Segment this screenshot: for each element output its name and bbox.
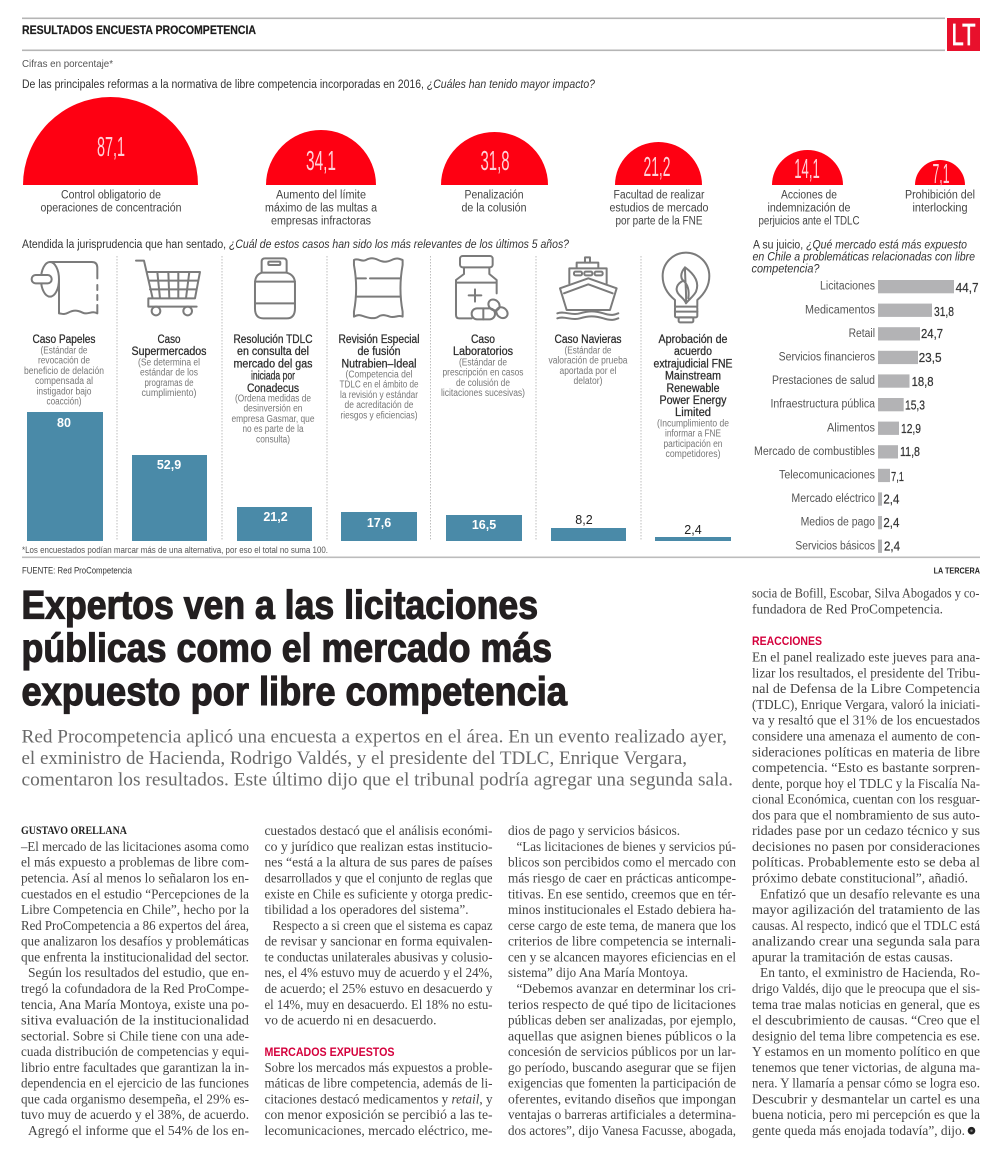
case: gas: iniciada por <box>251 371 295 383</box>
article column 4: Enfatizó que un desafío relevante es una <box>760 886 980 901</box>
case: gas: Conadecus <box>247 383 299 395</box>
bar chart: markets: 11,8 <box>900 445 920 459</box>
case: Laboratorios: de colusión de <box>456 378 510 389</box>
article column 3: sistema” dijo Ana María Montoya. <box>508 965 688 980</box>
article column 1: librio entre facultades que garantizan la in- <box>21 1060 249 1075</box>
case: Papeles: coacción) <box>46 396 82 408</box>
semicircle: límite multas <box>265 130 378 228</box>
bar chart: markets: 12,9 <box>901 422 921 436</box>
semicircle: límite multas: 34,1 <box>306 145 336 176</box>
case: gas: no es parte de la <box>242 424 304 435</box>
semicircle: control obligatorio: operaciones de concentración <box>40 202 182 214</box>
case: Mainstream: Aprobación de <box>658 334 728 346</box>
subheading: mercados expuestos: MERCADOS EXPUESTOS <box>264 1047 395 1059</box>
article column 2: Sobre los mercados más expuestos a proble- <box>264 1060 492 1075</box>
article column 1: Según los resultados del estudio, que en- <box>28 965 249 980</box>
article column 4: políticas. Probablemente esto se deba al <box>752 855 980 870</box>
article column 2: co y jurídico que realizan estas institucio- <box>264 839 492 854</box>
bar: 21,2 <box>237 507 312 541</box>
semicircle: colusión: 31,8 <box>480 145 510 176</box>
case: Papeles: revocación de <box>38 356 90 367</box>
semicircle: indemnización: perjuicios ante el TDLC <box>758 216 860 228</box>
question: market <box>752 240 975 276</box>
icon: gas cylinder <box>255 258 295 318</box>
article column 2: de revisar y sancionar en forma equivalen- <box>264 934 492 949</box>
question: cases: Atendida la jurisprudencia que han sentado, ¿Cuál de estos casos han sido los más relevantes de los últimos 5 años? <box>22 239 570 251</box>
bar chart: markets: 44,7 <box>956 281 979 295</box>
case: Nutrabien: (Competencia del <box>346 370 412 380</box>
case: Navieras: (Estándar de <box>564 346 612 356</box>
semicircle: límite multas: empresas infractoras <box>271 216 371 228</box>
case: Laboratorios: (Estándar de <box>459 358 507 368</box>
article column 2: nes, el 4% estuvo muy de acuerdo y el 24%, <box>264 965 492 980</box>
article column 2: te conductas unilaterales abusivas y colusio- <box>264 949 492 964</box>
article column 1: el más expuesto a problemas de libre com- <box>21 855 249 870</box>
semicircle: interlocking: 7,1 <box>932 158 950 189</box>
article column 1 <box>20 825 249 1138</box>
icon: medicine bottle and pills <box>456 256 510 320</box>
bar: 17,6 <box>341 512 417 541</box>
logo: LT: LT <box>952 17 976 52</box>
article column 1: que enfrenta la institucionalidad del sector. <box>21 949 249 964</box>
case: Laboratorios: prescripción en casos <box>442 368 524 379</box>
case: Laboratorios: licitaciones sucesivas) <box>441 388 525 399</box>
icon: snack bar pack <box>354 258 403 318</box>
article column 3: exigencias que fomenten la participación de <box>508 1076 736 1091</box>
semicircle: estudios de mercado <box>610 142 708 228</box>
article column 4: socia de Bofill, Escobar, Silva Abogados y co- <box>752 586 980 600</box>
article column 4: sideraciones políticas en materia de libre <box>752 744 980 759</box>
article column 4 <box>752 586 980 1138</box>
article deck: el exministro de Hacienda, Rodrigo Valdés, y el presidente del TDLC, Enrique Vergara, <box>22 748 687 769</box>
question: market: competencia? <box>752 264 820 276</box>
article column 4: dos para que el nombramiento de sus auto- <box>752 807 980 822</box>
semicircle: interlocking: interlocking <box>912 202 968 214</box>
question: market: en Chile a problemáticas relacionadas con libre <box>752 252 975 264</box>
article column 3: “Debemos avanzar en determinar los cri- <box>516 981 736 996</box>
case: Nutrabien <box>338 258 420 541</box>
case: Nutrabien: la revisión y estándar <box>340 390 419 401</box>
article column 2 <box>264 823 493 1138</box>
article column 4: designio del tema libre competencia es ese. <box>752 1028 980 1043</box>
bar chart: markets: 15,3 <box>905 398 925 412</box>
semicircle: control obligatorio <box>23 97 198 214</box>
case: Mainstream: Mainstream <box>665 371 721 383</box>
icon: toilet paper roll <box>32 262 97 314</box>
article column 1: –El mercado de las licitaciones asoma como <box>20 839 249 854</box>
article column 1: que cada organismo desempeña, el 29% es- <box>21 1091 249 1106</box>
article column 4: Y estamos en un momento político en que <box>752 1044 980 1059</box>
semicircle: indemnización <box>758 150 860 228</box>
article column 4: va y resaltó que el 31% de los encuestados <box>752 713 980 728</box>
article column 4: drigo Valdés, dijo que le preocupa que el sis- <box>752 981 980 996</box>
article column 3: más riesgo de caer en prácticas anticompe- <box>508 870 736 886</box>
case: Papeles <box>24 262 104 541</box>
case: Supermercados: estándar de los <box>140 368 198 379</box>
case: Nutrabien: TDLC en el ámbito de <box>340 380 419 391</box>
article column 4: mayor agilización del tratamiento de las <box>752 902 980 917</box>
article column 4: (TDLC), Enrique Vergara, valoró la iniciati- <box>752 697 980 712</box>
panel: cases <box>24 253 733 541</box>
icon: light bulb with leaf <box>663 253 709 322</box>
case: Supermercados: Supermercados <box>132 346 207 358</box>
source: FUENTE: Red ProCompetencia <box>22 566 132 576</box>
case: gas: consulta) <box>256 434 290 445</box>
article column 3: go período, buscando asegurar que se fijen <box>508 1060 736 1075</box>
case: Nutrabien: de fusión <box>358 346 400 358</box>
semicircle chart: reforms <box>23 97 975 228</box>
icon: end mark <box>968 1127 975 1134</box>
article column 3: públicas deben ser analizadas, por ejemplo, <box>508 1012 736 1028</box>
bar: 21,2: 21,2 <box>263 510 288 524</box>
article column 1: tencia, Ana María Montoya, existe una po- <box>21 997 249 1012</box>
bar: 52,9: 52,9 <box>157 458 181 472</box>
article headline: públicas como el mercado más <box>22 627 552 671</box>
case: gas: desinversión en <box>244 404 302 415</box>
question: reforms: De las principales reformas a la normativa de libre competencia incorporadas en 2016, ¿Cuáles han tenido mayor impacto? <box>22 79 596 91</box>
semicircle: control obligatorio: 87,1 <box>97 131 125 162</box>
bar chart: markets: 24,7 <box>921 327 943 341</box>
article column 4: buena noticia, pero mi percepción es que la <box>752 1107 980 1122</box>
bar: 80: 80 <box>57 416 71 430</box>
units note: Cifras en porcentaje* <box>22 59 113 70</box>
article deck: Red Procompetencia aplicó una encuesta a expertos en el área. En un evento realizado ayer, <box>22 726 727 748</box>
case: Nutrabien: Nutrabien–Ideal <box>342 358 416 370</box>
article headline: Expertos ven a las licitaciones <box>22 584 538 628</box>
semicircle: control obligatorio: Control obligatorio de <box>61 190 161 202</box>
article column 1: petencia. Así al menos lo señalaron los en- <box>21 870 249 886</box>
subheading: reacciones: REACCIONES <box>752 636 822 648</box>
credit: La Tercera: LA TERCERA <box>934 566 980 576</box>
bar chart: markets: Mercado eléctrico <box>791 493 875 505</box>
semicircle: estudios de mercado: Facultad de realizar <box>614 190 705 202</box>
article column 4: considere una amenaza el aumento de con- <box>752 728 980 744</box>
article column 1: dependencia en el ejercicio de las funciones <box>21 1076 249 1091</box>
case: Mainstream: informar a FNE <box>665 429 721 440</box>
article column 3: dos actores”, dijo Vanesa Facusse, abogada, <box>508 1123 736 1138</box>
article column 4: causas. Al respecto, indicó que el TDLC está <box>752 918 980 933</box>
case: Nutrabien: riesgos y eficiencias) <box>340 410 418 421</box>
case: Supermercados: programas de <box>144 378 194 389</box>
article column 2: lecomunicaciones, mercado eléctrico, me- <box>264 1123 492 1138</box>
footnote: *Los encuestados podían marcar más de una alternativa, por eso el total no suma 100. <box>22 545 328 556</box>
bar: 16,5: 16,5 <box>472 518 496 532</box>
article column 1: Libre Competencia en Chile”, hecho por la <box>21 902 249 917</box>
article column 2: el 14%, muy en desacuerdo. El 18% no estu- <box>264 997 492 1012</box>
article column 3: cerse cargo de este tema, de manera que los <box>508 918 736 933</box>
semicircle: estudios de mercado: por parte de la FNE <box>616 216 703 228</box>
semicircle: estudios de mercado: estudios de mercado <box>610 202 708 214</box>
bar: 52,9 <box>132 455 207 541</box>
semicircle: indemnización: Acciones de <box>781 190 837 202</box>
semicircle: colusión <box>441 132 548 214</box>
bar chart: markets: Prestaciones de salud <box>772 375 875 387</box>
article column 2: de acuerdo; el 25% estuvo en desacuerdo y <box>264 981 493 996</box>
article column 2: citaciones destacó medicamentos y retail, y <box>264 1091 493 1106</box>
case: Papeles: (Estándar de <box>40 346 88 356</box>
case: gas: en consulta del <box>237 346 309 358</box>
case: gas: (Ordena medidas de <box>235 394 311 404</box>
bar chart: markets: 7,1 <box>891 470 904 484</box>
article column 1: Red ProCompetencia a 86 expertos del área, <box>21 918 249 933</box>
article column 4: el descubrimiento de causas. “Creo que el <box>752 1012 980 1028</box>
case: Supermercados <box>132 261 207 541</box>
article column 4: ridades pase por un cedazo técnico y sus <box>752 823 980 838</box>
article column 3: ventajas o barreras artificiales a determina- <box>508 1107 736 1122</box>
bar chart: markets: Medios de pago <box>801 517 875 529</box>
article column 4: decisiones no pasen por consideraciones <box>752 839 980 854</box>
semicircle: colusión: Penalización <box>464 190 524 202</box>
article column 1: tregó la cofundadora de la Red ProCompe- <box>21 981 249 996</box>
case: gas: mercado del gas <box>234 358 313 370</box>
icon: shopping cart <box>136 261 200 315</box>
bar: 2,4 <box>655 523 731 541</box>
infographic header <box>22 17 980 52</box>
case: Papeles: beneficio de delación <box>24 366 104 377</box>
article column 3: aquellas que asignen bienes públicos o la <box>508 1028 736 1043</box>
article column 1: Agregó el informe que el 54% de los en- <box>28 1123 249 1138</box>
case: Mainstream: extrajudicial FNE <box>654 358 733 370</box>
case: Supermercados: Caso <box>158 334 180 346</box>
case: Mainstream: participación en <box>664 439 722 450</box>
article column 1: sitiva evaluación de la institucionalidad <box>21 1012 249 1028</box>
article column 3: blicos son percibidos como el mercado con <box>508 855 736 870</box>
case: Laboratorios <box>441 256 525 541</box>
article column 3: concesión de servicios públicos por un lar- <box>508 1044 736 1059</box>
bar chart: markets: 23,5 <box>919 351 942 365</box>
case: Supermercados: (Se determina el <box>138 358 200 368</box>
case: Laboratorios: Laboratorios <box>453 346 513 358</box>
article column 3: titivas. En ese sentido, creemos que en tér- <box>508 886 736 901</box>
case: Nutrabien: Revisión Especial <box>338 334 420 346</box>
bar chart: markets: 2,4 <box>883 492 899 506</box>
case: Supermercados: cumplimiento) <box>142 388 196 399</box>
semicircle: interlocking: Prohibición del <box>905 190 975 202</box>
case: Navieras: aportada por el <box>560 366 616 377</box>
article column 3: dios de pago y servicios básicos. <box>508 823 680 838</box>
bar chart: markets: Infraestructura pública <box>770 399 876 411</box>
article column 2: vo de acuerdo ni en desacuerdo. <box>264 1012 436 1028</box>
case: Mainstream: Limited <box>675 407 711 419</box>
case: Navieras <box>548 257 628 541</box>
bar: 16,5 <box>446 515 522 541</box>
case: Mainstream: Renewable <box>666 383 720 395</box>
bar chart: markets: Mercado de combustibles <box>754 446 875 458</box>
article deck: comentaron los resultados. Este último dijo que el tribunal podría agregar una segunda sala. <box>22 770 733 790</box>
case: Nutrabien: de acreditación de <box>344 400 414 411</box>
bar: 2,4: 2,4 <box>684 523 702 537</box>
bar: 8,2 <box>551 513 626 541</box>
bar chart: markets: Licitaciones <box>820 281 875 293</box>
header title: RESULTADOS ENCUESTA PROCOMPETENCIA <box>22 25 256 37</box>
case: Laboratorios: Caso <box>471 334 495 346</box>
semicircle: límite multas: Aumento del límite <box>276 190 366 202</box>
case: Navieras: delator) <box>574 376 602 387</box>
article column 1: que analizaron los desafíos y problemáticas <box>21 934 249 949</box>
case: Mainstream: (Incumplimiento de <box>657 418 729 430</box>
bar chart: markets <box>754 280 979 554</box>
article column 4: Descubrir y desmantelar un cartel es una <box>752 1091 980 1106</box>
case: Navieras: Caso Navieras <box>554 334 622 346</box>
article column 3: oferentes, evitando diseños que impongan <box>508 1091 736 1106</box>
bar chart: markets: 31,8 <box>934 305 954 319</box>
bar: 8,2: 8,2 <box>575 513 593 527</box>
bar chart: markets: Retail <box>849 328 875 340</box>
article deck <box>22 726 733 790</box>
article column 3: cen y se alcancen mayores eficiencias en el <box>508 949 736 964</box>
article column 2: Respecto a si creen que el sistema es capaz <box>272 918 493 933</box>
bar: 80 <box>27 412 103 541</box>
article column 3 <box>508 823 736 1138</box>
bar: 17,6: 17,6 <box>367 516 391 530</box>
semicircle: límite multas: máximo de las multas a <box>265 202 378 214</box>
article column 2: existe en Chile es suficiente y otorga predic- <box>264 886 492 901</box>
bar chart: markets: 18,8 <box>912 375 934 389</box>
case: Mainstream: competidores) <box>666 449 720 460</box>
semicircle: estudios de mercado: 21,2 <box>644 151 670 182</box>
article column 4: lizar los resultados, el presidente del Tribu- <box>752 665 980 680</box>
article column 2: con menor exposición se percibió a las te- <box>264 1107 492 1122</box>
bar chart: markets: 2,4 <box>883 516 899 530</box>
bar chart: markets: Telecomunicaciones <box>779 470 875 482</box>
bar chart: markets: 2,4 <box>884 540 900 554</box>
byline: GUSTAVO ORELLANA <box>21 825 128 837</box>
article column 4: competencia. “Esto es bastante sorpren- <box>752 760 980 775</box>
icon: ship <box>557 257 618 320</box>
article column 2: cuestados destacó que el análisis económi- <box>264 823 492 838</box>
article column 3: “Las licitaciones de bienes y servicios pú- <box>516 839 736 854</box>
bar chart: markets: Servicios financieros <box>779 352 875 364</box>
case: Mainstream <box>654 253 733 541</box>
article headline <box>22 584 568 714</box>
case: gas <box>232 258 315 541</box>
bar chart: markets: Servicios básicos <box>795 540 875 552</box>
article column 2: desarrollados y que el conjunto de reglas que <box>264 870 493 886</box>
article column 4: analizando crear una segunda sala para <box>752 934 980 949</box>
case: Papeles: Caso Papeles <box>32 334 96 346</box>
article column 4: nera. Y llamaría a pensar cómo se logra eso. <box>752 1076 980 1091</box>
case: Mainstream: acuerdo <box>674 346 712 358</box>
semicircle: interlocking <box>905 158 975 214</box>
article column 1: tuvo muy de acuerdo y el 38%, de acuerdo. <box>21 1107 249 1122</box>
article column 4: cional Económica, cuentan con los resguar- <box>752 792 980 807</box>
semicircle: colusión: de la colusión <box>462 202 526 214</box>
case: Mainstream: Power Energy <box>660 395 727 407</box>
article column 4: fundadora de Red ProCompetencia. <box>752 601 943 616</box>
article column 2: tibilidad a los operadores del sistema”. <box>264 902 468 917</box>
case: Papeles: compensada al <box>35 376 93 387</box>
article column 1: cuada distribución de competencias y equi- <box>21 1044 249 1059</box>
article column 4: En el panel realizado este jueves para ana- <box>752 650 980 665</box>
article column 2: máticas de libre competencia, además de li- <box>264 1076 492 1091</box>
article column 4: gente queda más enojada todavía”, dijo. <box>752 1123 965 1138</box>
article column 4: dente, porque hoy el TDLC y la Fiscalía Na- <box>752 776 980 791</box>
article headline: expuesto por libre competencia <box>22 670 568 714</box>
article column 4: nal de Defensa de la Libre Competencia <box>752 681 980 696</box>
article column 4: tenemos que tener victorias, de alguna ma- <box>752 1060 980 1075</box>
article column 3: criterios de libre competencia se internali- <box>508 934 736 949</box>
article column 3: terios respecto de qué tipo de licitaciones <box>508 997 736 1012</box>
case: gas: Resolución TDLC <box>234 334 312 346</box>
bar chart: markets: Alimentos <box>827 422 875 434</box>
article column 2: nes “está a la altura de sus pares de países <box>264 855 492 870</box>
article column 1: sectorial. Sobre si Chile tiene con una ade- <box>21 1028 249 1043</box>
question: market: A su juicio, ¿Qué mercado está más expuesto <box>753 240 968 252</box>
article column 4: próximo debate constitucional”, añadió. <box>752 870 968 886</box>
semicircle: indemnización: 14,1 <box>794 153 820 184</box>
semicircle: indemnización: indemnización de <box>768 202 850 214</box>
case: Papeles: instigador bajo <box>36 386 92 397</box>
article column 4: apurar la tramitación de estas causas. <box>752 949 953 964</box>
article column 3: minos institucionales el Estado debiera ha- <box>508 902 736 917</box>
case: gas: empresa Gasmar, que <box>232 414 315 425</box>
article column 4: tema trae malas noticias en general, que es <box>752 997 980 1012</box>
article column 4: En tanto, el exministro de Hacienda, Ro- <box>760 965 980 980</box>
bar chart: markets: Medicamentos <box>805 304 875 316</box>
article column 1: cuestados en el estudio “Percepciones de la <box>21 886 249 901</box>
case: Navieras: valoración de prueba <box>548 356 628 367</box>
